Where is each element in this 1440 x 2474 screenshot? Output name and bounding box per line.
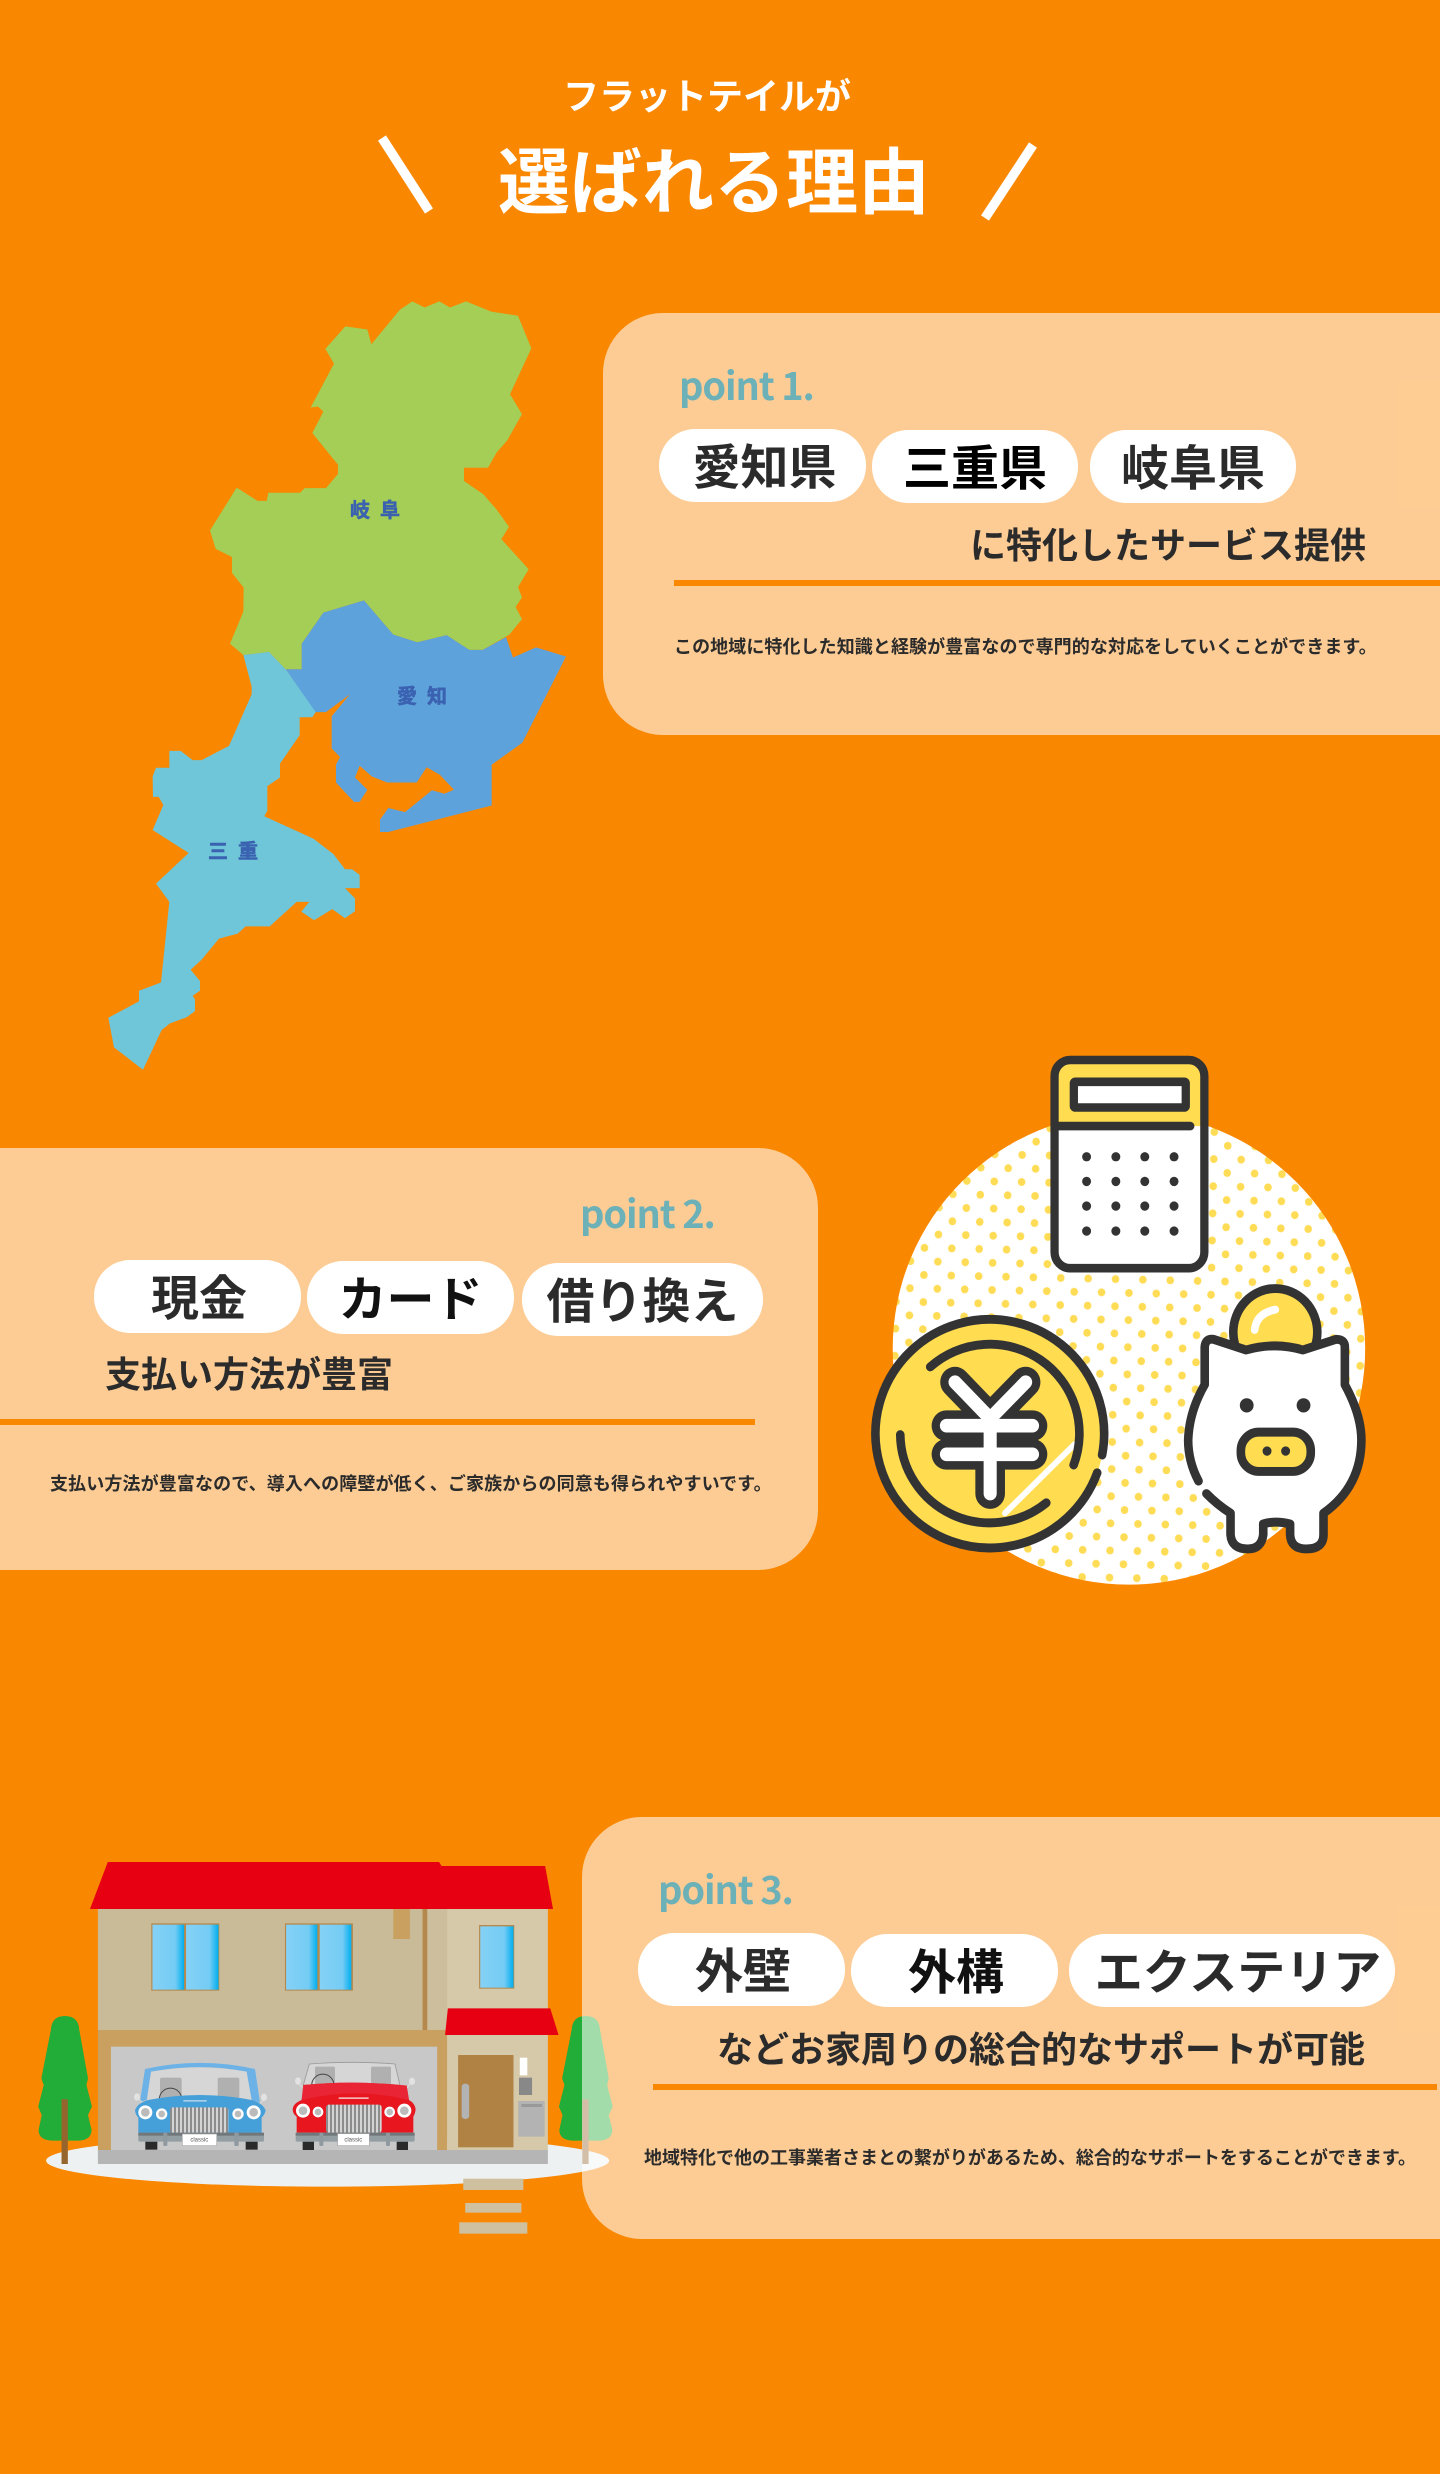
illustration: house with garage and two classic cars bbox=[38, 1862, 613, 2234]
pill: cash: 現金 bbox=[151, 1259, 247, 1329]
map labels: 岐 bbox=[350, 494, 370, 523]
map region: Mie bbox=[108, 652, 360, 1070]
tree: right bbox=[559, 2016, 613, 2164]
pill: Mie: 三重県 bbox=[903, 429, 1047, 499]
steps bbox=[459, 2179, 527, 2234]
map labels bbox=[208, 494, 447, 864]
front door bbox=[458, 2055, 513, 2147]
ground ellipse bbox=[46, 2135, 609, 2187]
subheading: 支払い方法が豊富 bbox=[105, 1346, 393, 1398]
pill: card bbox=[307, 1261, 514, 1334]
title: heading block bbox=[498, 68, 930, 229]
house walls bbox=[98, 1909, 548, 2164]
pill: outdoor structure bbox=[851, 1934, 1058, 2007]
porch roof bbox=[445, 2008, 559, 2035]
car: blue classic: classic bbox=[190, 2137, 208, 2143]
pill: exterior wall bbox=[638, 1933, 845, 2006]
pill: exterior: エクステリア bbox=[1095, 1933, 1381, 2003]
car: red classic bbox=[293, 2062, 416, 2150]
tree: left bbox=[38, 2016, 92, 2164]
heading: small lead: フラットテイルが bbox=[563, 68, 851, 120]
body text: この地域に特化した知識と経験が豊富なので専門的な対応をしていくことができます。 bbox=[674, 633, 1377, 659]
entry fixtures bbox=[518, 2058, 545, 2137]
pill: outdoor structure: 外構 bbox=[908, 1933, 1004, 2003]
car: blue classic bbox=[134, 2063, 267, 2150]
map labels: 知 bbox=[427, 680, 447, 709]
panel: point 2 bbox=[0, 1148, 818, 1570]
point label: point 3. bbox=[658, 1860, 793, 1915]
pill: Gifu: 岐阜県 bbox=[1121, 429, 1265, 499]
subheading: などお家周りの総合的なサポートが可能 bbox=[717, 2021, 1365, 2073]
heading: main title: 選ばれる理由 bbox=[498, 124, 930, 229]
point label: point 1. bbox=[679, 356, 814, 411]
map region: Gifu bbox=[210, 301, 531, 669]
pill: Mie bbox=[872, 430, 1078, 503]
map: Gifu, Aichi, Mie prefectures bbox=[108, 301, 566, 1070]
window: centre bbox=[285, 1923, 353, 1991]
body text: 支払い方法が豊富なので、導入への障壁が低く、ご家族からの同意も得られやすいです。 bbox=[50, 1470, 772, 1496]
map labels: 三 bbox=[208, 835, 228, 864]
pill: card: カード bbox=[338, 1260, 482, 1330]
car: red classic: classic bbox=[344, 2137, 362, 2143]
main roof bbox=[90, 1862, 553, 1909]
pill: Aichi bbox=[659, 429, 866, 502]
map labels: 阜 bbox=[380, 494, 400, 523]
map labels: 重 bbox=[238, 835, 258, 864]
panel: point 3 bbox=[582, 1817, 1440, 2239]
icon: yen coin bbox=[875, 1319, 1104, 1548]
icon: piggy bank with coin bbox=[1188, 1289, 1361, 1549]
icon: calculator bbox=[1055, 1060, 1204, 1268]
icon: title slash marks bbox=[378, 135, 1037, 221]
point label: point 2. bbox=[580, 1184, 715, 1239]
map region: Aichi bbox=[286, 600, 566, 832]
subheading: に特化したサービス提供 bbox=[970, 517, 1366, 569]
pill: refinance: 借り換え bbox=[546, 1262, 738, 1332]
body text: 地域特化で他の工事業者さまとの繋がりがあるため、総合的なサポートをすることができます。 bbox=[644, 2144, 1416, 2170]
pill: exterior wall: 外壁 bbox=[695, 1932, 791, 2002]
pill: cash bbox=[94, 1260, 301, 1333]
map labels: 愛 bbox=[397, 680, 417, 709]
pill: Aichi: 愛知県 bbox=[692, 428, 836, 498]
illustration: calculator, yen coin and piggy bank bbox=[871, 1056, 1366, 1585]
pill: Gifu bbox=[1090, 430, 1296, 503]
panel: point 1 bbox=[603, 313, 1440, 735]
window: left bbox=[151, 1923, 219, 1991]
window: right bbox=[479, 1925, 514, 1989]
dotted background circle bbox=[893, 1112, 1365, 1585]
